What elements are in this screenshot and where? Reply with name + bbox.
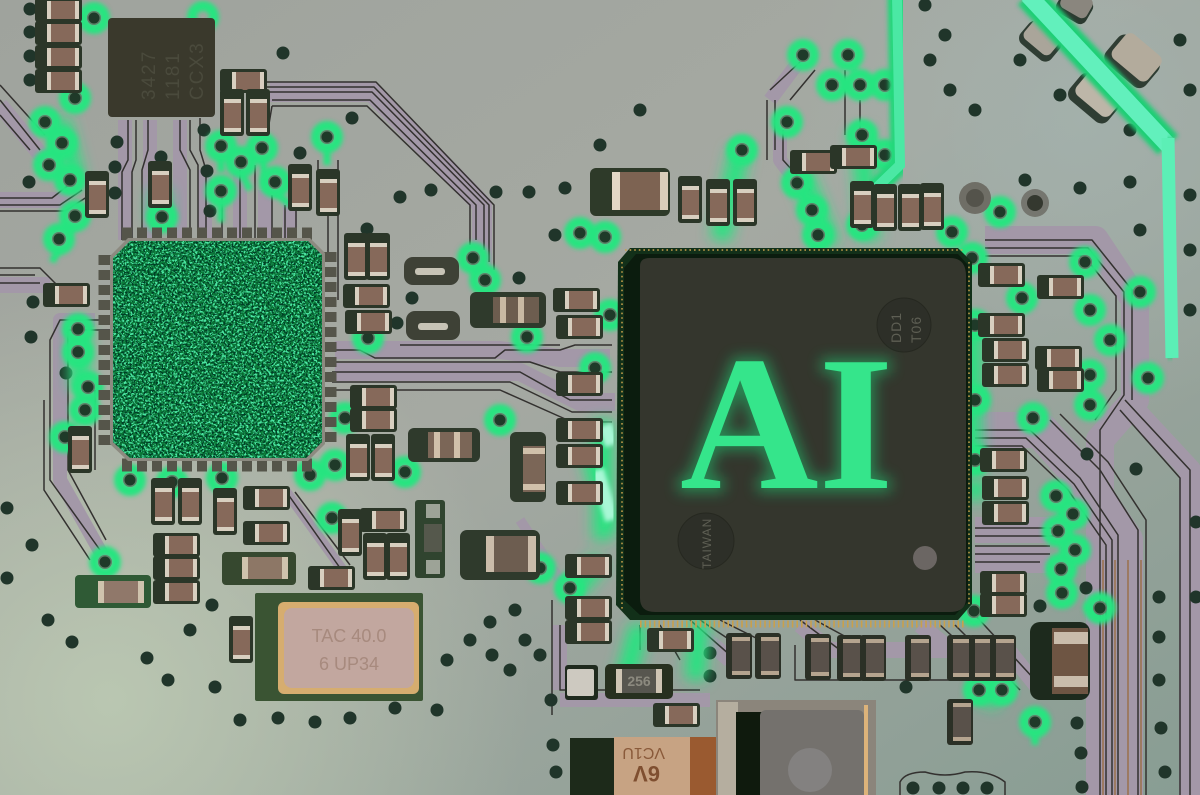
large capacitors and resistors bbox=[75, 168, 1090, 700]
chip pins bbox=[622, 250, 969, 624]
bright green power traces, top right bbox=[872, 0, 1172, 358]
small chip, top left bbox=[108, 18, 215, 117]
chip mark: TAIWAN bbox=[678, 513, 734, 569]
tantalum capacitor bbox=[570, 737, 716, 795]
crystal oscillator: 6 UP34 bbox=[319, 654, 379, 674]
AI glow: AI bbox=[680, 317, 893, 530]
green speckled chip bbox=[105, 234, 330, 465]
tantalum capacitor: 6V bbox=[633, 761, 660, 786]
small chip, top left: CCX3 bbox=[187, 41, 208, 100]
chip mark: TAIWAN: TAIWAN bbox=[700, 518, 714, 569]
SMD components, horizontal bbox=[35, 0, 1084, 727]
resistor marking: 256 bbox=[627, 673, 651, 689]
chip mark: date code: T06 bbox=[908, 316, 924, 343]
crystal oscillator bbox=[255, 593, 423, 701]
pin 1 dot bbox=[913, 546, 937, 570]
silver components, top right bbox=[959, 0, 1165, 217]
small chip, top left: 1181 bbox=[163, 51, 184, 100]
capacitor marking: VC1U bbox=[622, 744, 665, 761]
chip marking: 3427 bbox=[139, 50, 160, 100]
chip mark: date code bbox=[877, 298, 931, 352]
via tails bbox=[52, 147, 1100, 745]
orange-tinted trace edges, lower right bbox=[1103, 560, 1141, 795]
crystal marking: TAC 40.0 bbox=[312, 626, 386, 646]
chip mark: date code: DD1 bbox=[888, 312, 904, 343]
power inductor bbox=[716, 700, 876, 795]
SMD components, vertical bbox=[68, 89, 1016, 745]
main AI chip bbox=[616, 248, 972, 624]
brightest glow left of the AI chip bbox=[597, 425, 612, 520]
chip pads bbox=[105, 234, 330, 465]
AI letters: AI bbox=[680, 317, 893, 530]
